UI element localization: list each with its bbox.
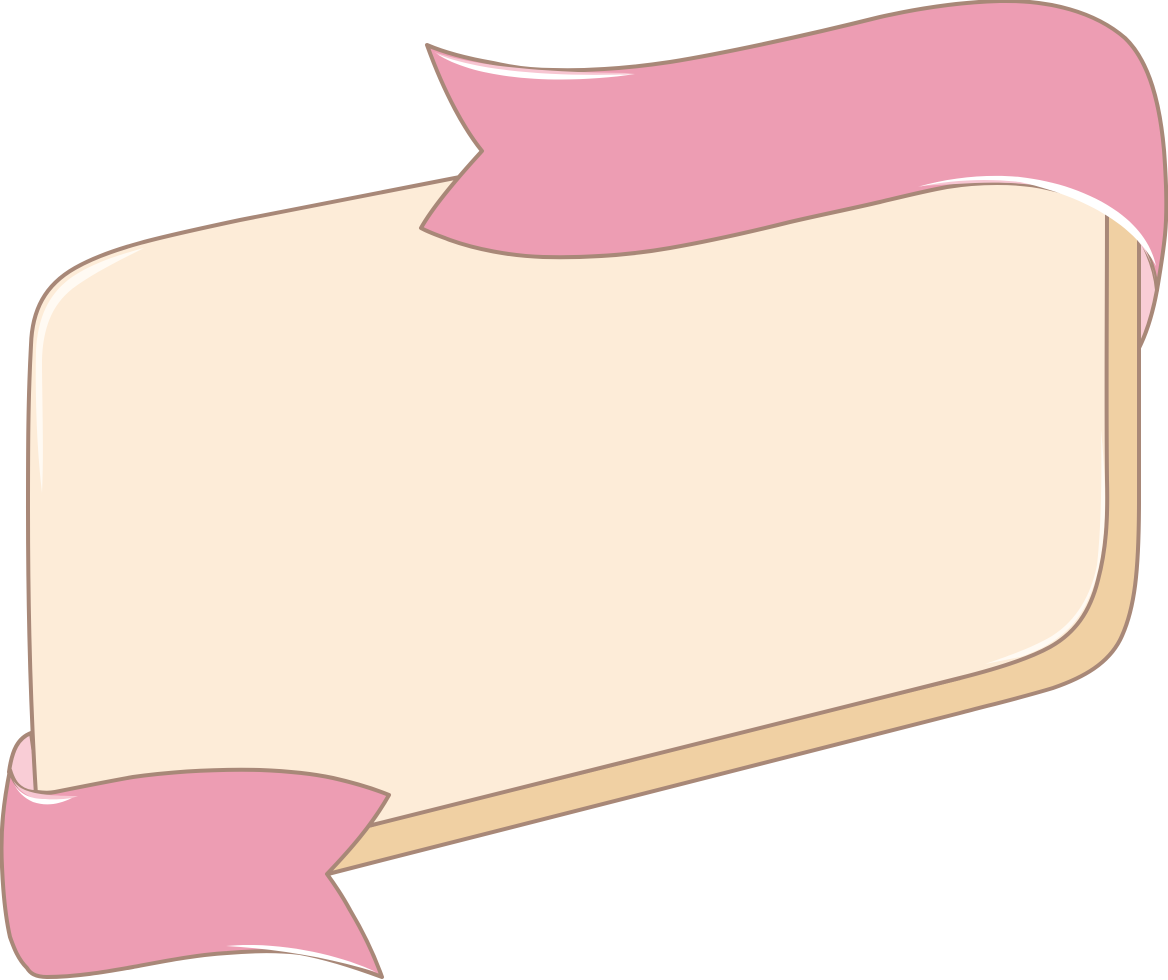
ribbon fold: top right underside (1120, 200, 1157, 348)
ribbon highlight: bottom left fold sheen (13, 780, 78, 802)
ribbon highlight: fold (918, 176, 1156, 266)
ribbon fold: bottom left underside (9, 733, 40, 800)
card highlight: bottom right (985, 430, 1105, 664)
ribbon highlight: bottom left fold (14, 784, 72, 804)
ribbon highlight: top edge sheen (434, 52, 635, 76)
panel: tan back layer (328, 200, 1139, 874)
ribbon highlight: fold sheen (920, 177, 1155, 280)
panel: cream front card (28, 150, 1107, 826)
ribbon highlight: top edge (437, 54, 635, 79)
ribbon: bottom left (1, 770, 389, 977)
card highlight: top left (36, 248, 144, 493)
card outline (28, 177, 1107, 826)
ribbon: top right (421, 1, 1166, 290)
ribbon highlight: bottom edge (226, 945, 376, 972)
